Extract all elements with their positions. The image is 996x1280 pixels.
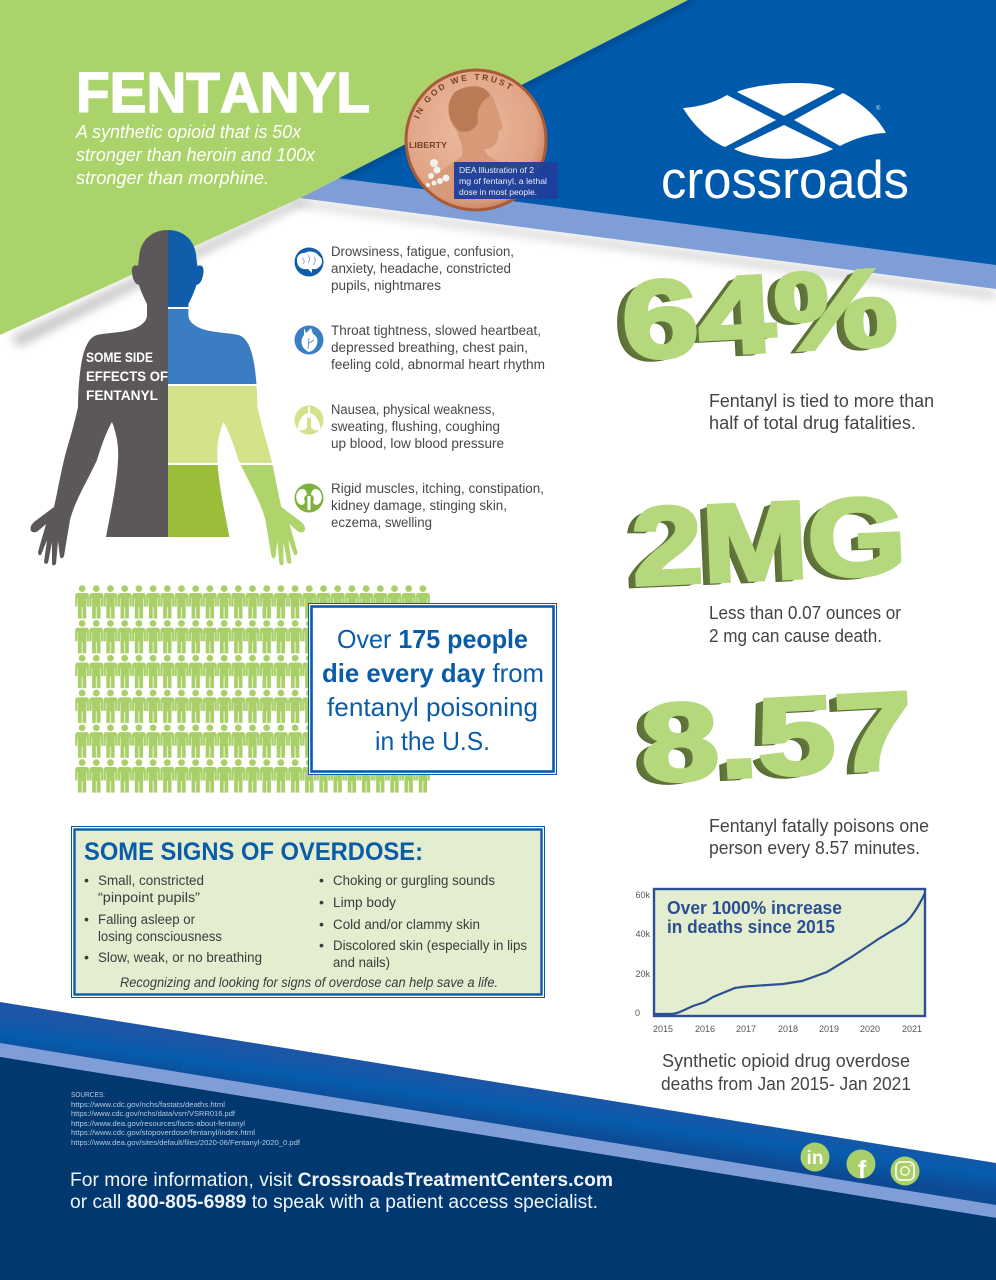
overdose list right: Choking or gurgling sounds <box>333 873 495 889</box>
text: brain effects: Drowsiness, fatigue, confusion, <box>331 244 514 260</box>
y axis labels: 20k <box>635 969 650 979</box>
overdose list right: Limp body <box>333 895 397 911</box>
overdose list right: • <box>319 917 324 933</box>
footer call to action: For more information, visit CrossroadsTreatmentCenters.com <box>70 1170 613 1191</box>
text: lung effects: sweating, flushing, coughing <box>331 419 500 435</box>
overdose list left: Small, constricted <box>98 873 204 889</box>
x axis labels <box>653 1024 922 1034</box>
icon: linkedin: in <box>807 1148 823 1169</box>
crossroads logo <box>661 83 909 210</box>
overdose list right: Cold and/or clammy skin <box>333 917 480 933</box>
overdose list right: • <box>319 895 324 911</box>
x axis labels: 2017 <box>736 1024 756 1034</box>
stat text: 64% <box>709 391 934 433</box>
overdose list right: Discolored skin (especially in lips <box>333 938 527 954</box>
x axis labels: 2021 <box>902 1024 922 1034</box>
overdose list left <box>84 873 262 966</box>
overdose list left: Slow, weak, or no breathing <box>98 950 262 966</box>
x axis labels: 2018 <box>778 1024 798 1034</box>
big stat: 64%: 64% <box>619 246 900 383</box>
line chart: synthetic opioid deaths <box>635 889 925 1034</box>
sources: https://www.cdc.gov/stopoverdose/fentanyl/index.html <box>71 1128 255 1137</box>
stat text: 2MG <box>709 603 901 646</box>
panel: body side effects <box>30 225 310 570</box>
sources: SOURCES: <box>71 1090 105 1099</box>
big stat: 8.57: 8.57 <box>638 669 916 806</box>
x axis labels: 2016 <box>695 1024 715 1034</box>
overdose note: Recognizing and looking for signs of overdose can help save a life. <box>120 975 498 991</box>
chart annotation: Over 1000% increase <box>667 898 842 918</box>
overdose list right: • <box>319 873 324 889</box>
sources: https://www.cdc.gov/nchs/data/vsrr/VSRR016.pdf <box>71 1109 235 1118</box>
footer call to action <box>70 1170 613 1213</box>
coin lettering: IN GOD WE TRUST <box>414 74 513 119</box>
y axis labels: 60k <box>635 890 650 900</box>
overdose list left: “pinpoint pupils” <box>98 890 200 906</box>
icon: brain <box>294 248 324 276</box>
text: heart effects: Throat tightness, slowed heartbeat, <box>331 323 541 339</box>
chart line <box>655 893 925 1014</box>
overdose list left: • <box>84 912 89 928</box>
text: lung effects <box>331 402 504 452</box>
text: kidney effects: Rigid muscles, itching, constipation, <box>331 481 544 497</box>
overdose heading: SOME SIGNS OF OVERDOSE: <box>84 838 423 866</box>
y axis labels <box>635 890 650 1018</box>
stat text: 8.57 <box>709 816 929 858</box>
text: lung effects: up blood, low blood pressure <box>331 436 504 452</box>
overdose list right <box>319 873 527 971</box>
callout: 175 people: in the U.S. <box>375 726 490 756</box>
title: FENTANYL <box>76 61 370 125</box>
text: brain effects: pupils, nightmares <box>331 278 441 294</box>
text: kidney effects <box>331 481 544 531</box>
y axis labels: 0 <box>635 1008 640 1018</box>
coin caption <box>454 162 558 199</box>
coin caption: dose in most people. <box>459 187 537 197</box>
body label: SOME SIDE <box>86 350 153 365</box>
chart caption: deaths from Jan 2015- Jan 2021 <box>661 1074 911 1094</box>
text: kidney effects: kidney damage, stinging skin, <box>331 498 507 514</box>
top blue banner <box>290 0 996 298</box>
subtitle: A synthetic opioid that is 50x <box>75 121 302 142</box>
Lincoln bust <box>425 86 532 203</box>
body label <box>86 350 168 403</box>
coin caption: DEA Illustration of 2 <box>459 165 534 175</box>
stat text: 64%: half of total drug fatalities. <box>709 413 916 433</box>
subtitle: stronger than morphine. <box>76 167 269 188</box>
text: heart effects: depressed breathing, chest pain, <box>331 340 528 356</box>
text: lung effects: Nausea, physical weakness, <box>331 402 495 418</box>
sources <box>71 1090 300 1147</box>
icon: facebook: f <box>858 1156 867 1184</box>
panel: signs of overdose <box>72 826 544 998</box>
icon: facebook <box>846 1150 876 1184</box>
coin caption: mg of fentanyl, a lethal <box>459 176 547 186</box>
body label: FENTANYL <box>86 388 158 403</box>
overdose list left: losing consciousness <box>98 929 222 945</box>
body figure <box>30 225 310 570</box>
stat text: 2MG: 2 mg can cause death. <box>709 626 882 646</box>
overdose list right: • <box>319 938 324 954</box>
sources: https://www.cdc.gov/nchs/fastats/deaths.html <box>71 1100 225 1109</box>
icon: heart <box>294 326 324 354</box>
text: heart effects: feeling cold, abnormal heart rhythm <box>331 357 545 373</box>
overdose list left: • <box>84 950 89 966</box>
icon: kidneys <box>294 484 324 512</box>
text: brain effects <box>331 244 514 294</box>
sources: https://www.dea.gov/sites/default/files/2020-06/Fentanyl-2020_0.pdf <box>71 1138 300 1147</box>
overdose list left: Falling asleep or <box>98 912 195 928</box>
x axis labels: 2015 <box>653 1024 673 1034</box>
callout: 175 people <box>308 604 556 774</box>
sources: https://www.dea.gov/resources/facts-about-fentanyl <box>71 1119 245 1128</box>
text: brain effects: anxiety, headache, constricted <box>331 261 511 277</box>
fentanyl powder <box>426 159 450 187</box>
chart caption <box>661 1051 911 1094</box>
callout: 175 people: fentanyl poisoning <box>327 692 538 722</box>
subtitle <box>75 121 316 188</box>
icon: linkedin <box>800 1142 830 1172</box>
overdose list right: and nails) <box>333 955 390 971</box>
penny illustration <box>404 68 548 212</box>
text: kidney effects: eczema, swelling <box>331 515 432 531</box>
icon: lungs <box>294 406 324 434</box>
bottom banner <box>0 1002 996 1280</box>
y axis labels: 40k <box>635 929 650 939</box>
pictogram of people <box>75 585 430 794</box>
x axis labels: 2019 <box>819 1024 839 1034</box>
footer call to action: or call 800-805-6989 to speak with a patient access specialist. <box>70 1192 598 1213</box>
overdose list left: • <box>84 873 89 889</box>
stat text: 64%: Fentanyl is tied to more than <box>709 391 934 411</box>
callout: 175 people: die every day from <box>322 658 544 688</box>
icon: instagram <box>890 1156 920 1186</box>
penny illustration: LIBERTY <box>409 140 447 150</box>
stat text: 8.57: Fentanyl fatally poisons one <box>709 816 929 836</box>
crossroads logo: ® <box>876 105 881 112</box>
green corner banner <box>0 0 688 346</box>
big stat: 2MG: 2MG <box>629 474 909 609</box>
chart annotation: in deaths since 2015 <box>667 917 835 937</box>
chart annotation <box>667 898 842 937</box>
callout: 175 people: Over 175 people <box>337 624 528 654</box>
crossroads logo: crossroads <box>661 151 909 210</box>
text: heart effects <box>331 323 545 373</box>
x axis labels: 2020 <box>860 1024 880 1034</box>
body label: EFFECTS OF <box>86 369 168 384</box>
subtitle: stronger than heroin and 100x <box>76 144 316 165</box>
chart caption: Synthetic opioid drug overdose <box>662 1051 910 1071</box>
stat text: 2MG: Less than 0.07 ounces or <box>709 603 901 623</box>
stat text: 8.57: person every 8.57 minutes. <box>709 838 920 858</box>
